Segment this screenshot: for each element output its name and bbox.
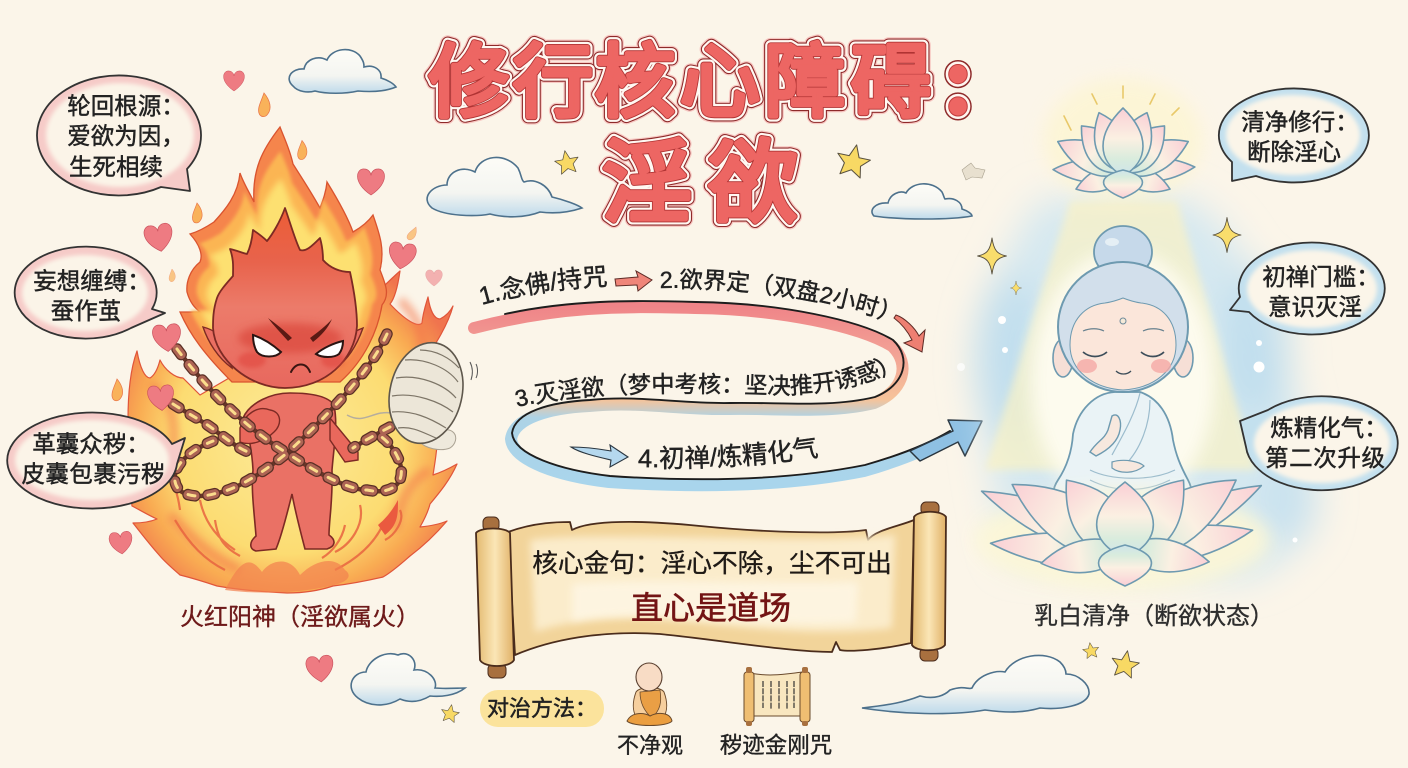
bubble: 炼精化气 bbox=[1240, 396, 1398, 490]
title: 淫欲 bbox=[602, 110, 798, 240]
title: 修行核心障碍 bbox=[429, 18, 931, 134]
figure: red yang spirit in flames bbox=[127, 127, 477, 593]
step texts: 2.欲界定（双盘2小时） bbox=[660, 268, 887, 320]
cloud bottom left bbox=[351, 654, 465, 705]
title: 修行核心障碍 bbox=[429, 18, 931, 134]
chains bbox=[173, 334, 401, 496]
yellow halo top bbox=[1043, 78, 1203, 202]
lower flames bbox=[127, 271, 457, 593]
title bbox=[429, 18, 969, 240]
bubble: 轮回根源 bbox=[37, 75, 201, 195]
cloud top left bbox=[289, 50, 396, 93]
label: 不净观: 不净观 bbox=[617, 733, 683, 758]
head bbox=[1053, 226, 1193, 392]
title: : bbox=[947, 19, 969, 135]
sparkles bbox=[957, 218, 1298, 542]
bubble: 革囊众秽: 皮囊包裹污秽 bbox=[22, 461, 164, 487]
flow band bbox=[474, 307, 956, 485]
bubble: 清净修行: 清净修行： bbox=[1241, 103, 1359, 137]
icon: sutra scroll bbox=[744, 667, 810, 726]
lower body and robe bbox=[1054, 392, 1191, 515]
step texts bbox=[480, 265, 887, 470]
top lotus bbox=[1051, 86, 1196, 199]
small blue arrow bbox=[571, 445, 628, 467]
big lotus bbox=[975, 460, 1271, 590]
light beam bbox=[985, 201, 1256, 470]
antidote methods bbox=[480, 663, 832, 758]
chain end hearts bbox=[147, 323, 182, 412]
scroll paper bbox=[508, 520, 914, 655]
caption: right figure: 乳白清净（断欲状态） bbox=[1034, 603, 1274, 630]
small red down arrow bbox=[894, 315, 925, 352]
bubble: 初禅门槛 bbox=[1230, 242, 1385, 334]
bubble: 革囊众秽 bbox=[7, 413, 185, 509]
title: : bbox=[947, 19, 969, 135]
decorative stars bbox=[440, 141, 1141, 723]
label: 秽迹金刚咒: 秽迹金刚咒 bbox=[720, 733, 832, 758]
flow line bbox=[505, 301, 950, 479]
bubble: 妄想缠缚: 蚕作茧 bbox=[51, 298, 121, 324]
title: 淫欲 bbox=[602, 110, 798, 240]
bubble: 轮回根源: 爱欲为因， bbox=[67, 123, 185, 149]
purification flow arrow bbox=[468, 265, 983, 492]
title: 修行核心障碍 bbox=[429, 18, 931, 134]
left roller bbox=[476, 517, 514, 678]
bandaged cocoon bbox=[347, 335, 478, 451]
bubble: 清净修行 bbox=[1219, 88, 1369, 182]
hearts and sparks bbox=[108, 71, 442, 683]
bubble: 炼精化气: 第二次升级 bbox=[1265, 445, 1385, 471]
cloud centre left bbox=[427, 157, 582, 217]
step texts: 1.念佛/持咒 bbox=[480, 265, 607, 305]
bubble: 初禅门槛: 初禅门槛： bbox=[1262, 258, 1380, 292]
title: 淫欲 bbox=[602, 110, 798, 240]
pill label: 对治方法： bbox=[487, 691, 597, 723]
blue watercolor aura bbox=[975, 195, 1318, 580]
title: : bbox=[947, 19, 969, 135]
caption: left figure: 火红阳神（淫欲属火） bbox=[180, 604, 420, 631]
scroll: core quote bbox=[476, 502, 946, 678]
bubble: 清净修行: 断除淫心 bbox=[1247, 139, 1341, 165]
right roller bbox=[912, 502, 946, 661]
title: 修行核心障碍 bbox=[429, 18, 931, 134]
cloud bottom right bbox=[862, 655, 1089, 714]
bubble: 轮回根源: 生死相续 bbox=[69, 154, 163, 180]
icon: meditating monk bbox=[627, 663, 672, 726]
step texts: 3.灭淫欲（梦中考核：坚决推开诱惑） bbox=[515, 358, 886, 406]
bubble: 初禅门槛: 意识灭淫 bbox=[1268, 294, 1362, 320]
step texts: 4.初禅/炼精化气 bbox=[638, 437, 818, 470]
title: 修行核心障碍 bbox=[429, 18, 931, 134]
arms bbox=[330, 418, 358, 462]
scroll: core quote: 直心是道场 bbox=[631, 590, 791, 626]
bubble: 革囊众秽: 革囊众秽： bbox=[32, 425, 150, 459]
bubble: 炼精化气: 炼精化气： bbox=[1270, 409, 1388, 443]
quote text: 核心金句：淫心不除，尘不可出 bbox=[532, 549, 892, 578]
title: : bbox=[947, 19, 969, 135]
arrowhead blue bbox=[910, 420, 982, 461]
title: 淫欲 bbox=[602, 110, 798, 240]
bubble: 妄想缠缚: 妄想缠缚： bbox=[33, 262, 151, 296]
figure: pure meditating buddha bbox=[957, 78, 1318, 590]
small red arrow bbox=[615, 271, 652, 291]
title: 淫欲 bbox=[602, 110, 798, 240]
head bbox=[203, 208, 363, 388]
cloud centre right bbox=[872, 184, 972, 219]
bubble: 轮回根源: 轮回根源： bbox=[67, 87, 185, 121]
body bbox=[243, 393, 336, 551]
head flame bbox=[180, 127, 386, 382]
bubble: 妄想缠缚 bbox=[15, 247, 165, 339]
